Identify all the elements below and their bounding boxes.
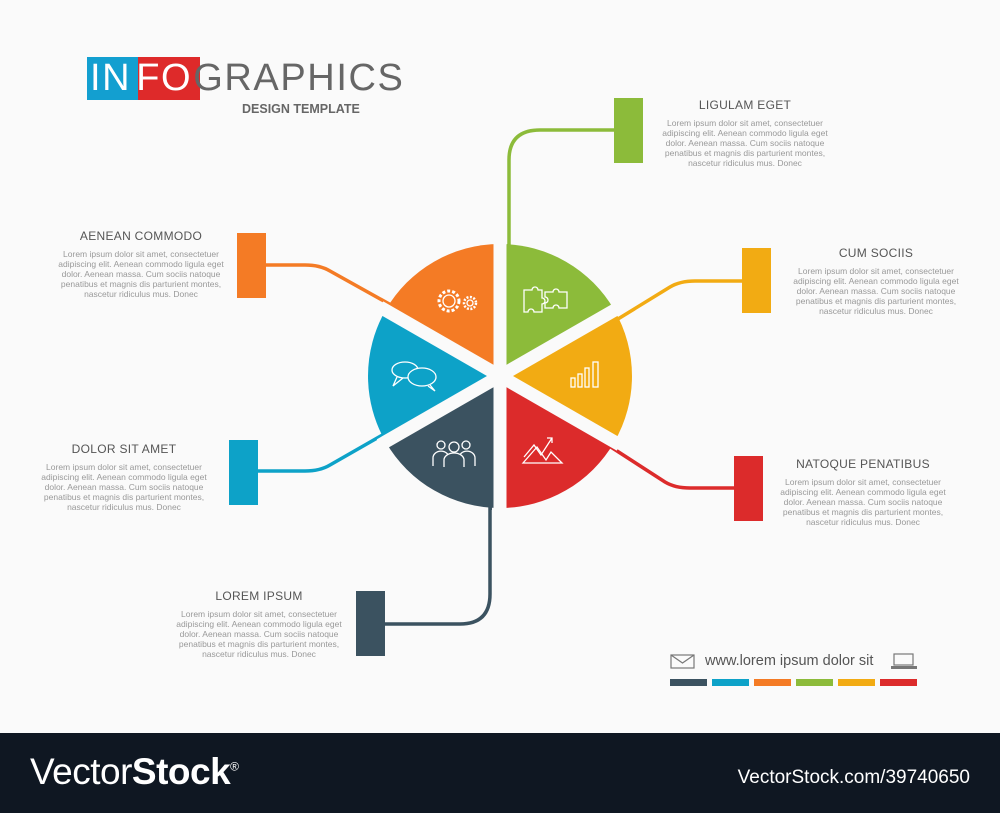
subtitle: DESIGN TEMPLATE — [242, 102, 360, 116]
box: dark — [356, 591, 385, 656]
text: dolor sit amet: DOLOR SIT AMET — [72, 442, 176, 456]
connector: orange — [264, 265, 400, 310]
text: cum sociis: CUM SOCIIS — [839, 246, 913, 260]
text: lorem ipsum: Lorem ipsum dolor sit amet, consectetuer adipiscing elit. Aenean commodo ligula eget dolor. Aenean massa. Cum sociis natoque penatibus et magnis dis parturient montes, nascetur ridiculus mus. Donec — [176, 609, 342, 659]
text: aenean commodo: AENEAN COMMODO — [80, 229, 202, 243]
icon: puzzle — [524, 287, 567, 312]
text: ligulam eget: Lorem ipsum dolor sit amet, consectetuer adipiscing elit. Aenean commodo ligula eget dolor. Aenean massa. Cum sociis natoque penatibus et magnis dis parturient montes, nascetur ridiculus mus. Donec — [662, 118, 828, 168]
text: dolor sit amet: Lorem ipsum dolor sit amet, consectetuer adipiscing elit. Aenean commodo ligula eget dolor. Aenean massa. Cum sociis natoque penatibus et magnis dis parturient montes, nascetur ridiculus mus. Donec — [41, 462, 207, 512]
color bars — [670, 679, 917, 686]
footer contact — [670, 653, 917, 686]
icon: speech bubbles — [392, 362, 436, 391]
box: yellow — [742, 248, 771, 313]
icon: bar chart — [571, 362, 598, 387]
watermark bar: VectorStock® — [30, 751, 239, 792]
box: blue — [229, 440, 258, 505]
box: orange — [237, 233, 266, 298]
icon: laptop — [891, 653, 917, 669]
title logo INFO: INFOGRAPHICS — [90, 57, 404, 99]
title — [87, 57, 404, 116]
text: cum sociis: Lorem ipsum dolor sit amet, consectetuer adipiscing elit. Aenean commodo ligula eget dolor. Aenean massa. Cum sociis natoque penatibus et magnis dis parturient montes, nascetur ridiculus mus. Donec — [793, 266, 959, 316]
connector: red — [600, 440, 736, 488]
box: green — [614, 98, 643, 163]
connector: yellow — [600, 281, 744, 330]
text: ligulam eget: LIGULAM EGET — [699, 98, 791, 112]
icon: gears — [439, 291, 476, 311]
icon: envelope — [670, 654, 695, 669]
text: natoque penatibus: Lorem ipsum dolor sit amet, consectetuer adipiscing elit. Aenean commodo ligula eget dolor. Aenean massa. Cum sociis natoque penatibus et magnis dis parturient montes, nascetur ridiculus mus. Donec — [780, 477, 946, 527]
box: red — [734, 456, 763, 521]
icon: trend — [523, 438, 562, 463]
icon: people — [433, 441, 475, 467]
connector: dark — [384, 500, 490, 624]
text: natoque penatibus: NATOQUE PENATIBUS — [796, 457, 930, 471]
connector: green — [509, 130, 616, 250]
pie chart — [368, 238, 632, 514]
connector: blue — [256, 425, 400, 471]
text: lorem ipsum: LOREM IPSUM — [215, 589, 303, 603]
watermark bar — [0, 733, 1000, 813]
footer contact: www.lorem ipsum dolor sit — [705, 653, 873, 669]
watermark bar: VectorStock.com/39740650 — [738, 767, 970, 788]
text: aenean commodo: Lorem ipsum dolor sit amet, consectetuer adipiscing elit. Aenean commodo ligula eget dolor. Aenean massa. Cum sociis natoque penatibus et magnis dis parturient montes, nascetur ridiculus mus. Donec — [58, 249, 224, 299]
